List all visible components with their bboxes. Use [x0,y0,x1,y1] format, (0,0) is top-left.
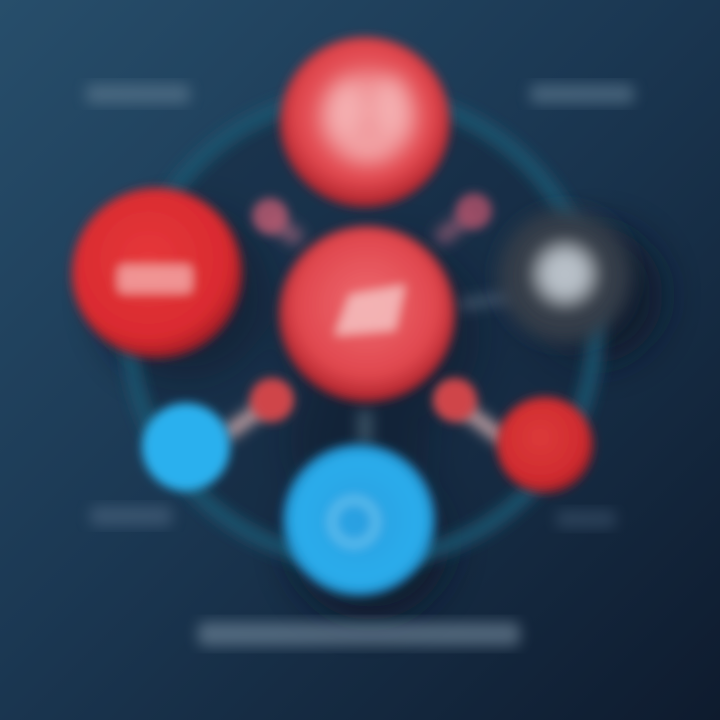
connector: lower right [445,395,505,440]
icon: top node glyph [320,72,416,164]
label: lower left [90,506,172,526]
connector: centre to dark node [460,295,520,305]
connector: top right [438,212,474,240]
icon: left node glyph [118,265,192,293]
label: top right [530,84,634,104]
connectors [225,212,520,445]
icon: centre node glyph [335,285,405,335]
icon: dark node glyph [538,247,592,301]
connector: top left [268,218,300,240]
node: left red circle [72,188,242,358]
label: lower right [556,510,616,528]
label: top left [86,84,190,104]
node: centre red circle [279,226,455,402]
node: dark grey right [499,210,631,342]
node: top red circle [280,37,450,207]
node: lower left blue circle [142,403,230,491]
ring: large teal circle behind nodes [128,94,596,562]
icon: bottom node glyph [332,500,376,544]
connector joints [250,193,492,422]
node: lower right red circle [497,397,593,493]
bottom caption [198,622,520,646]
node: bottom blue circle [283,444,435,596]
connector: vertical [358,410,372,445]
dark drop shadows [100,210,663,620]
connector: lower left [225,395,280,435]
